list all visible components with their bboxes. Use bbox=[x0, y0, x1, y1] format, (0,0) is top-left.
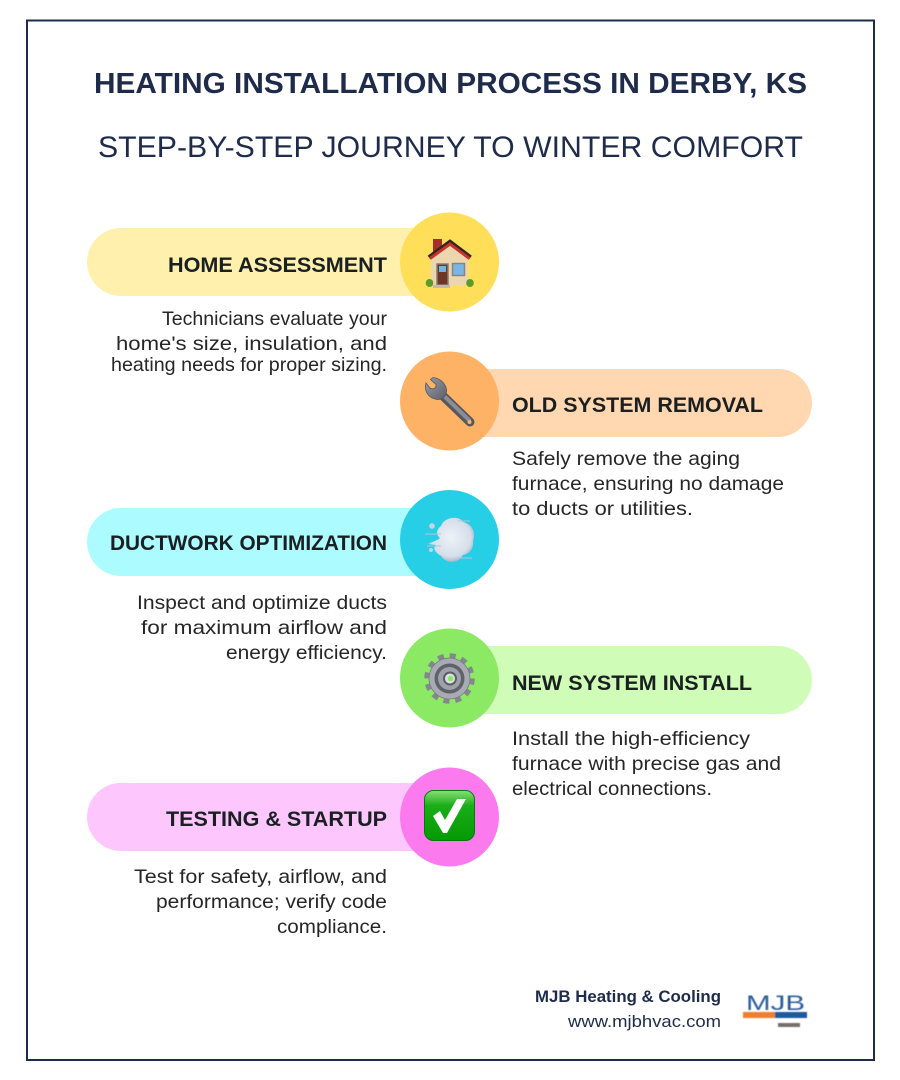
icon: house bbox=[426, 239, 474, 288]
step 2 description: to ducts or utilities. bbox=[512, 498, 693, 520]
step 2 description: Safely remove the aging bbox=[512, 448, 740, 470]
step 3 description: Inspect and optimize ducts bbox=[137, 592, 387, 614]
panel: step 3 ductwork optimization bbox=[87, 490, 499, 664]
panel: step 5 testing and startup bbox=[87, 768, 499, 938]
step 1 circle bbox=[400, 212, 499, 312]
step 1 description: heating needs for proper sizing. bbox=[111, 354, 387, 376]
step 5 pill bbox=[87, 783, 450, 851]
icon: dash of air bbox=[425, 518, 474, 562]
icon: MJB logo: MJB bbox=[746, 992, 805, 1015]
step 4 description: furnace with precise gas and bbox=[512, 753, 781, 775]
panel: step 4 new system install bbox=[400, 628, 812, 800]
step 4 pill bbox=[449, 646, 812, 714]
step 2 description bbox=[512, 448, 784, 520]
step 3 circle bbox=[400, 490, 499, 589]
panel: step 1 home assessment bbox=[87, 212, 499, 376]
subtitle: STEP-BY-STEP JOURNEY TO WINTER COMFORT bbox=[98, 131, 803, 164]
step 3 heading: DUCTWORK OPTIMIZATION bbox=[110, 531, 387, 555]
step 1 pill bbox=[87, 228, 450, 296]
step 2 heading: OLD SYSTEM REMOVAL bbox=[512, 393, 763, 417]
title: HEATING INSTALLATION PROCESS IN DERBY, KS bbox=[94, 68, 807, 100]
step 3 description: energy efficiency. bbox=[226, 642, 387, 664]
step 5 description: Test for safety, airflow, and bbox=[134, 866, 387, 888]
step 4 description: Install the high-efficiency bbox=[512, 728, 750, 750]
step 1 description bbox=[111, 308, 388, 376]
footer company name: MJB Heating & Cooling bbox=[535, 987, 721, 1006]
icon: wrench bbox=[425, 378, 472, 424]
step 3 pill bbox=[87, 508, 450, 576]
step 1 description: Technicians evaluate your bbox=[162, 308, 388, 330]
step 2 pill bbox=[449, 369, 812, 437]
footer website: www.mjbhvac.com bbox=[567, 1013, 721, 1031]
step 2 circle bbox=[400, 352, 499, 450]
step 4 heading: NEW SYSTEM INSTALL bbox=[512, 671, 752, 695]
panel: step 2 old system removal bbox=[400, 352, 812, 520]
step 4 circle bbox=[400, 628, 499, 728]
step 5 description: compliance. bbox=[277, 916, 387, 938]
step 2 description: furnace, ensuring no damage bbox=[512, 473, 784, 495]
step 5 description: performance; verify code bbox=[156, 891, 387, 913]
step 3 description bbox=[137, 592, 387, 664]
step 4 description: electrical connections. bbox=[512, 778, 712, 800]
icon: MJB logo bbox=[743, 992, 807, 1027]
step 1 description: home's size, insulation, and bbox=[116, 333, 387, 355]
icon: check mark bbox=[424, 790, 474, 840]
step 3 description: for maximum airflow and bbox=[141, 617, 387, 639]
step 5 heading: TESTING & STARTUP bbox=[166, 807, 387, 831]
step 5 circle bbox=[400, 768, 499, 866]
icon: gear bbox=[427, 656, 472, 701]
step 4 description bbox=[512, 728, 781, 800]
step 1 heading: HOME ASSESSMENT bbox=[168, 253, 387, 277]
step 5 description bbox=[134, 866, 387, 938]
